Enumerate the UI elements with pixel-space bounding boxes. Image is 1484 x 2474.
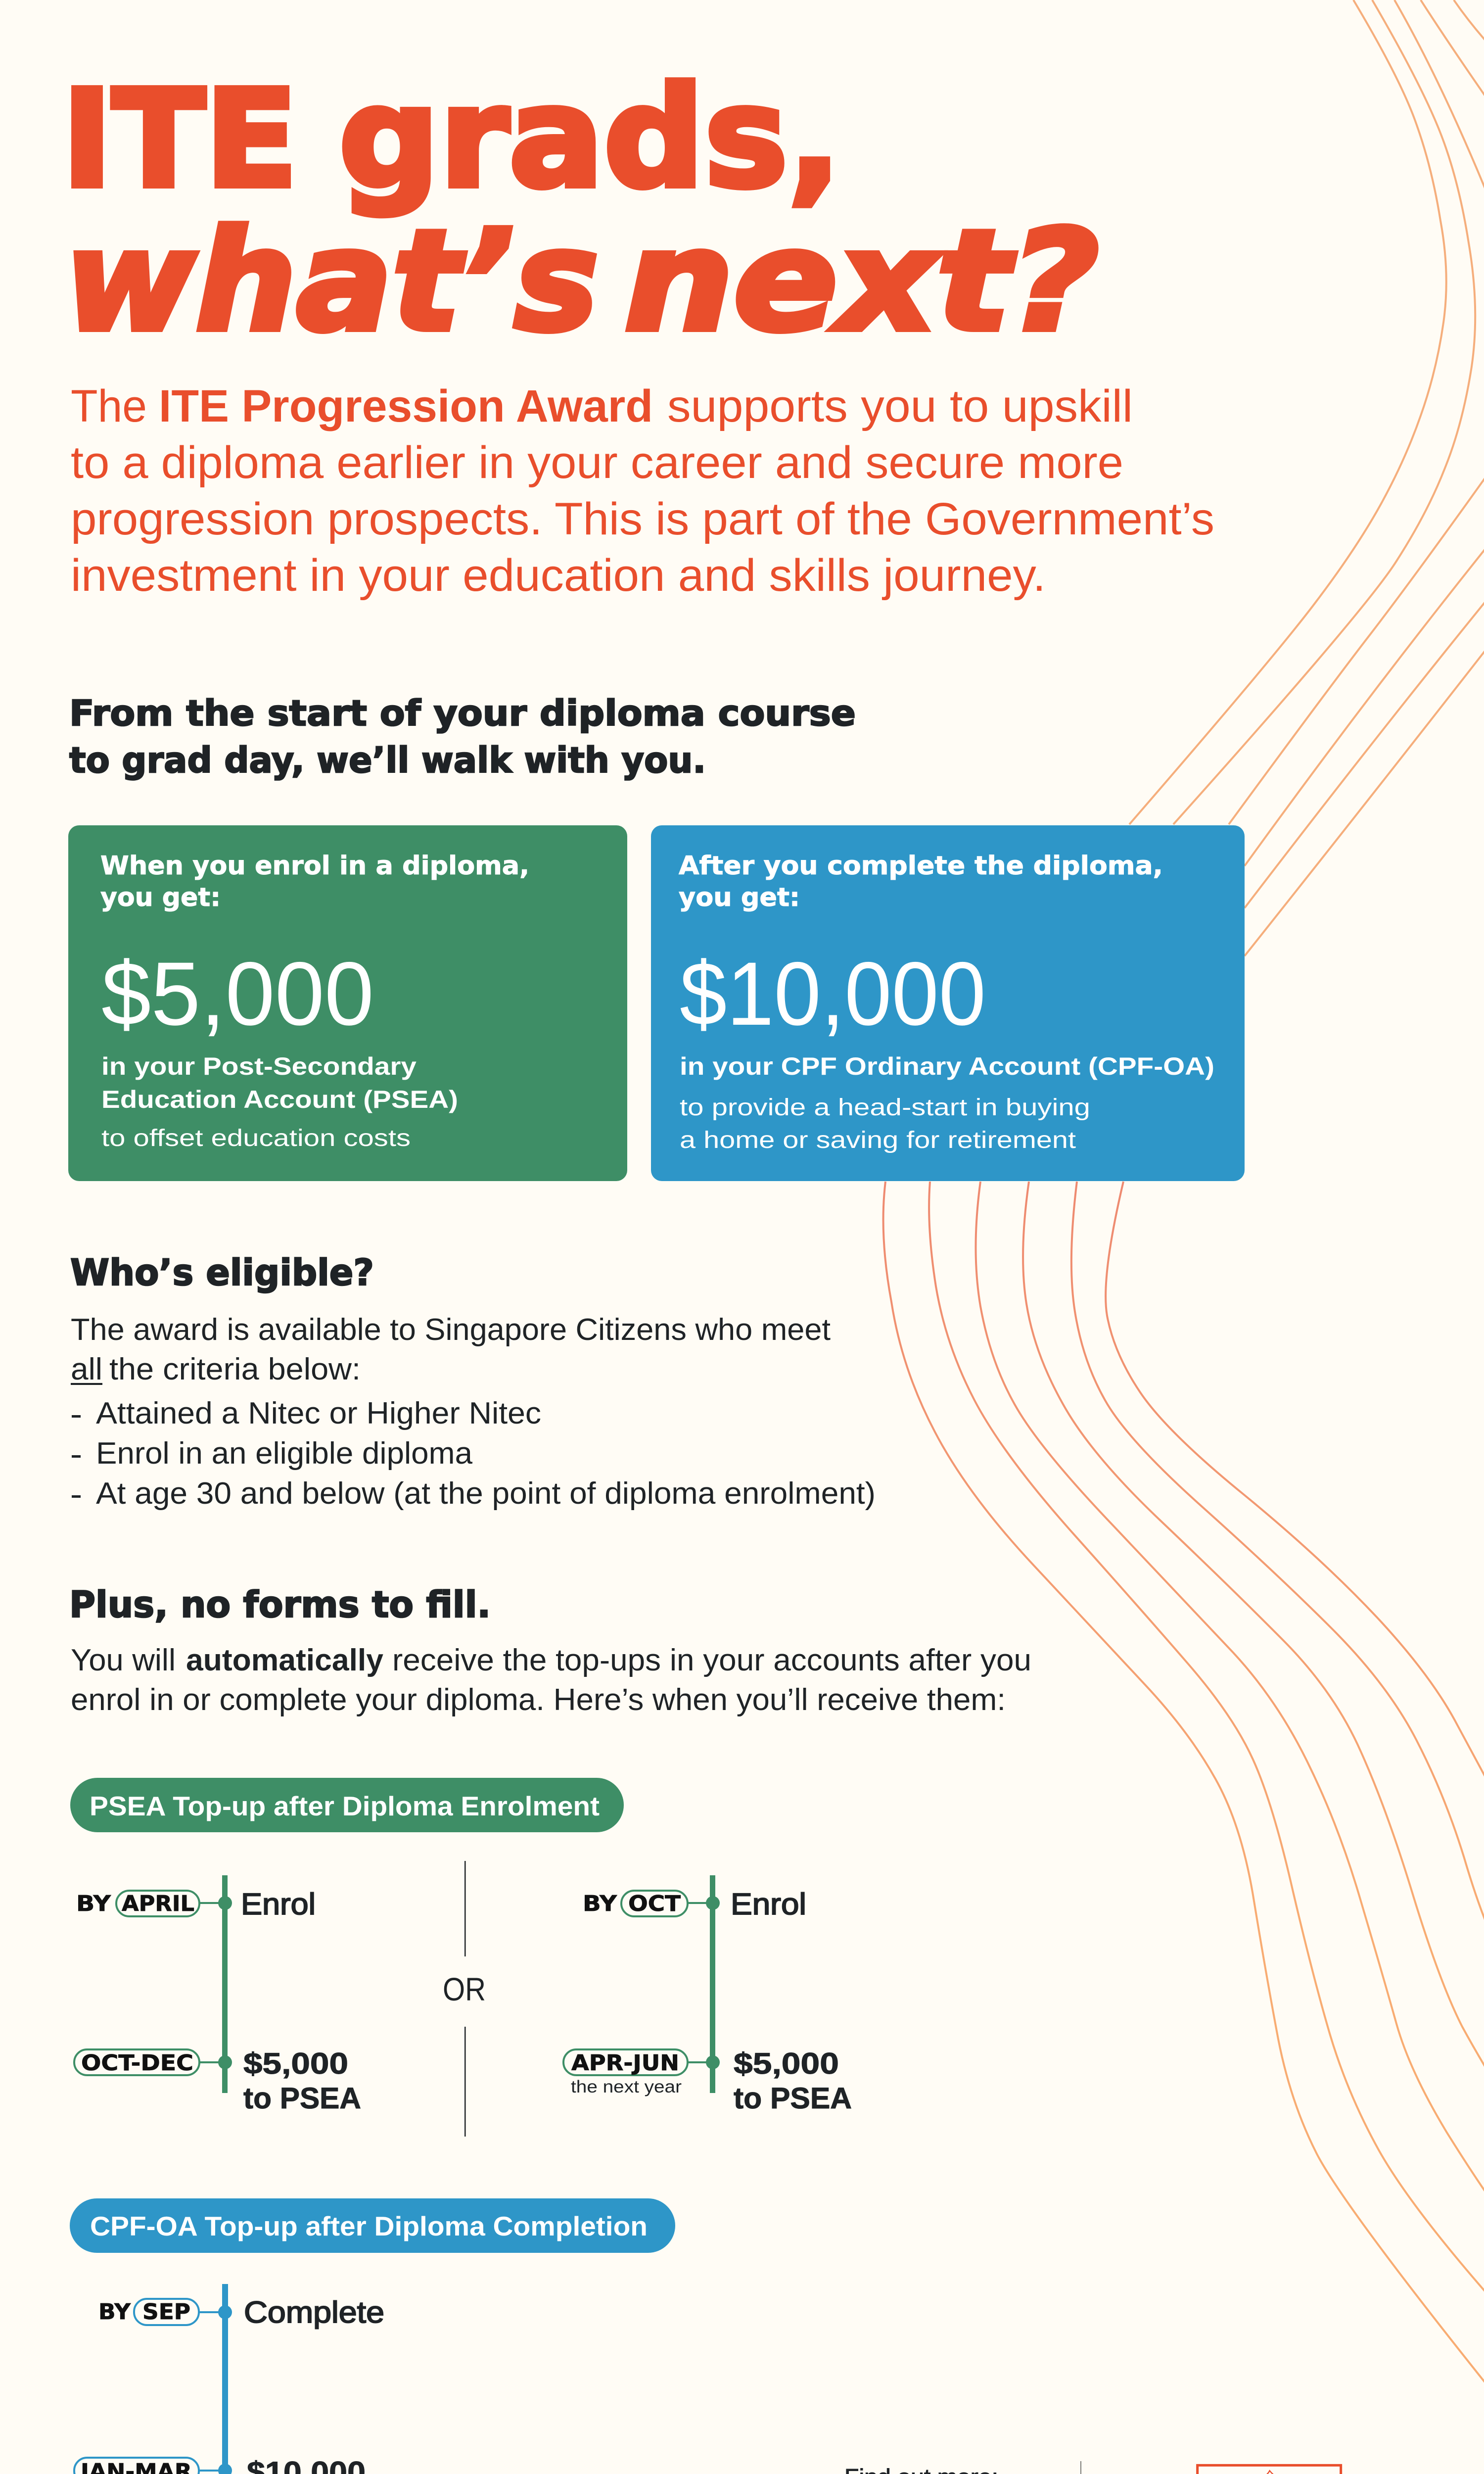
timeline: complete by September: BY xyxy=(98,2299,131,2325)
panel: completion award: After you complete the diploma, xyxy=(679,851,1163,881)
section heading: walk with you: From the start of your diploma course xyxy=(69,693,856,734)
pill: PSEA top-up: PSEA Top-up after Diploma Enrolment xyxy=(90,1791,600,1821)
timeline: complete by September: Complete xyxy=(244,2295,384,2329)
no forms text: automatically xyxy=(186,1643,384,1677)
timeline: enrol by October: the next year xyxy=(571,2077,682,2096)
panel: enrol award: you get: xyxy=(100,883,221,912)
timeline: enrol by April: OCT-DEC xyxy=(81,2050,193,2076)
eligibility text: Enrol in an eligible diploma xyxy=(96,1436,473,1471)
panel: completion award: you get: xyxy=(679,883,800,912)
panel: enrol award: Education Account (PSEA) xyxy=(101,1086,458,1113)
crest shield xyxy=(1198,2465,1341,2474)
eligibility text: At age 30 and below (at the point of diploma enrolment) xyxy=(96,1476,876,1511)
timeline: enrol by April: BY xyxy=(76,1891,111,1916)
timeline: enrol by April: APRIL xyxy=(122,1891,194,1916)
timeline: enrol by April: Enrol xyxy=(241,1887,316,1921)
heading: no forms to fill: Plus, no forms to fill. xyxy=(69,1584,491,1626)
eligibility text: all xyxy=(71,1352,102,1386)
panel: enrol award: $5,000 xyxy=(101,943,374,1044)
eligibility text xyxy=(71,1313,876,1511)
panel: completion award xyxy=(651,825,1245,1181)
title: what’s xyxy=(64,201,599,362)
no forms text: receive the top-ups in your accounts after you xyxy=(392,1643,1031,1677)
heading: who's eligible: Who’s eligible? xyxy=(70,1252,374,1294)
panel: completion award: in your CPF Ordinary Account (CPF-OA) xyxy=(680,1052,1214,1080)
timeline: enrol by October: OCT xyxy=(628,1891,681,1916)
timeline: enrol by April: to PSEA xyxy=(243,2082,361,2115)
panel: completion award: to provide a head-start in buying xyxy=(680,1094,1090,1121)
title: next? xyxy=(624,201,1099,362)
intro paragraph xyxy=(71,381,1214,601)
pill: CPF-OA top-up xyxy=(70,2198,675,2253)
panel: completion award: a home or saving for retirement xyxy=(680,1127,1076,1153)
timeline: enrol by October: Enrol xyxy=(731,1887,806,1921)
timeline: enrol by October: $5,000 xyxy=(734,2047,839,2080)
section heading: walk with you: to grad day, we’ll walk with you. xyxy=(69,740,706,781)
title xyxy=(62,57,1099,362)
timeline: enrol by October: to PSEA xyxy=(734,2082,852,2115)
panel: completion award: $10,000 xyxy=(680,943,986,1044)
eligibility text: Attained a Nitec or Higher Nitec xyxy=(96,1396,541,1430)
or divider: OR xyxy=(443,1971,486,2007)
timeline: enrol by October: APR-JUN xyxy=(571,2050,679,2076)
panel: enrol award: to offset education costs xyxy=(101,1125,411,1151)
MOE crest xyxy=(1196,2464,1343,2474)
no forms text xyxy=(71,1643,1031,1717)
no forms text: enrol in or complete your diploma. Here’s when you’ll receive them: xyxy=(71,1683,1006,1717)
panel: enrol award xyxy=(68,825,627,1181)
title: grads, xyxy=(339,57,841,219)
timeline: enrol by April xyxy=(74,1875,361,2115)
eligibility text: The award is available to Singapore Citizens who meet xyxy=(71,1313,831,1347)
intro paragraph: investment in your education and skills journey. xyxy=(71,550,1046,601)
crest torch xyxy=(1254,2471,1285,2474)
section heading: walk with you xyxy=(69,693,856,781)
timeline: enrol by October xyxy=(563,1875,852,2115)
timeline: enrol by October: BY xyxy=(583,1891,617,1916)
intro paragraph: to a diploma earlier in your career and secure more xyxy=(71,437,1123,488)
intro paragraph: The xyxy=(71,381,147,431)
intro paragraph: progression prospects. This is part of the Government’s xyxy=(71,494,1214,544)
timeline: complete by September: SEP xyxy=(142,2299,190,2325)
pill: PSEA top-up xyxy=(70,1778,624,1832)
timeline: enrol by April: $5,000 xyxy=(243,2047,348,2080)
no forms text: You will xyxy=(71,1643,176,1677)
intro paragraph: ITE Progression Award xyxy=(159,381,653,431)
panel: enrol award: When you enrol in a diploma, xyxy=(100,851,529,881)
pill: CPF-OA top-up: CPF-OA Top-up after Diploma Completion xyxy=(90,2211,648,2241)
intro paragraph: supports you to upskill xyxy=(667,381,1133,431)
eligibility text: the criteria below: xyxy=(109,1352,361,1386)
panel: enrol award: in your Post-Secondary xyxy=(101,1052,417,1080)
timeline: complete by September xyxy=(74,2284,402,2474)
title: ITE xyxy=(62,61,298,217)
